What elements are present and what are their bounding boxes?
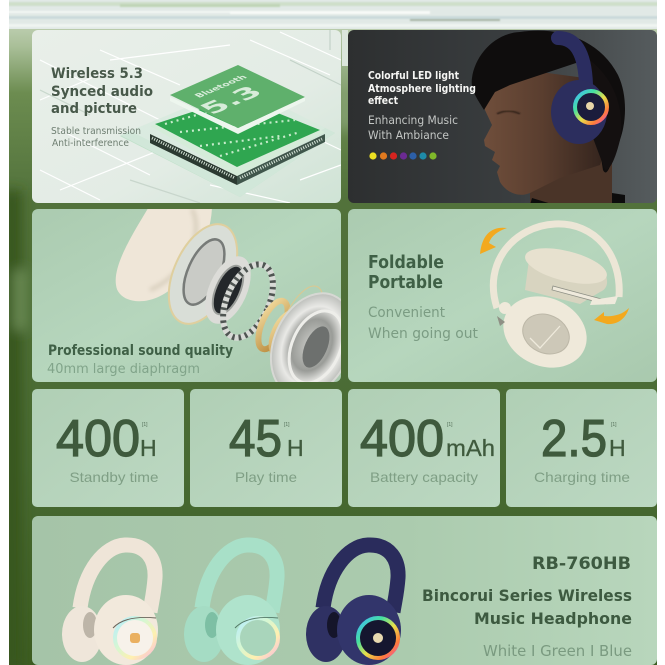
heading: and picture [51, 101, 137, 117]
stat card: play time [190, 389, 342, 507]
white headphones [62, 545, 158, 665]
stat card: standby time: H [140, 435, 157, 461]
arrow: lower rotation [594, 308, 629, 324]
panel: sound quality [32, 209, 341, 382]
heading: Portable [368, 272, 443, 293]
colour dots [369, 152, 437, 160]
subtext [368, 113, 458, 142]
stat card: charging time: H [609, 435, 626, 461]
man wearing headphones [472, 31, 625, 205]
subtext: Convenient [368, 305, 445, 321]
stat card: standby time [32, 389, 184, 507]
stat card: battery capacity: 400 [360, 410, 444, 468]
heading: Synced audio [51, 84, 153, 100]
chip label: 5.3 [193, 82, 269, 118]
product name [422, 586, 632, 628]
heading [368, 252, 444, 293]
stat card: battery capacity: mAh [446, 435, 495, 461]
exploded driver illustration [116, 209, 341, 382]
arrow: upper rotation [480, 228, 507, 254]
panel: product lineup [32, 516, 657, 665]
subtext [51, 126, 141, 149]
subtext: 40mm large diaphragm [47, 362, 200, 377]
stat card: battery capacity: Battery capacity [370, 469, 478, 485]
heading [51, 66, 153, 117]
stat card: charging time: [1] [611, 422, 617, 428]
stat card: standby time: Standby time [70, 469, 159, 485]
subtext [368, 305, 478, 342]
stat card: charging time [506, 389, 657, 507]
subtext: When going out [368, 326, 478, 342]
heading: Colorful LED light [368, 70, 459, 82]
heading: Foldable [368, 252, 444, 273]
stat card: play time: 45 [229, 410, 282, 468]
subtext: Stable transmission [51, 126, 141, 137]
stat card: play time: Play time [235, 469, 297, 485]
colour options: White I Green I Blue [483, 642, 632, 660]
circuit board lines [40, 30, 341, 203]
stat card: battery capacity: [1] [447, 422, 453, 428]
panel: Bluetooth 5.3 [32, 30, 341, 203]
heading: Professional sound quality [48, 343, 233, 359]
green headphones [184, 545, 280, 665]
subtext: Anti-interference [52, 138, 129, 149]
panel: LED light [348, 30, 657, 205]
product name: Bincorui Series Wireless [422, 586, 632, 605]
stat card: standby time: 400 [56, 410, 140, 468]
panel: foldable [348, 209, 657, 382]
model number: RB-760HB [532, 554, 631, 574]
top strip: pale water texture [0, 0, 665, 29]
stat card: play time: [1] [284, 422, 290, 428]
heading [368, 70, 476, 107]
stat card: charging time: 2.5 [541, 410, 607, 468]
chip illustration [120, 65, 335, 197]
blue headphones [306, 545, 401, 665]
heading: Atmosphere lighting [368, 83, 476, 95]
product name: Music Headphone [474, 609, 632, 628]
stat card: charging time: Charging time [534, 469, 630, 485]
chip label [192, 74, 269, 118]
stat card: battery capacity [348, 389, 500, 507]
subtext: With Ambiance [368, 128, 449, 142]
subtext: Enhancing Music [368, 113, 458, 127]
heading: Wireless 5.3 [51, 66, 143, 82]
chip label: Bluetooth [192, 74, 250, 99]
folded headphones [492, 224, 619, 381]
heading: effect [368, 95, 398, 107]
stat card: standby time: [1] [142, 422, 148, 428]
stat card: play time: H [287, 435, 304, 461]
headphone on head [551, 38, 607, 144]
